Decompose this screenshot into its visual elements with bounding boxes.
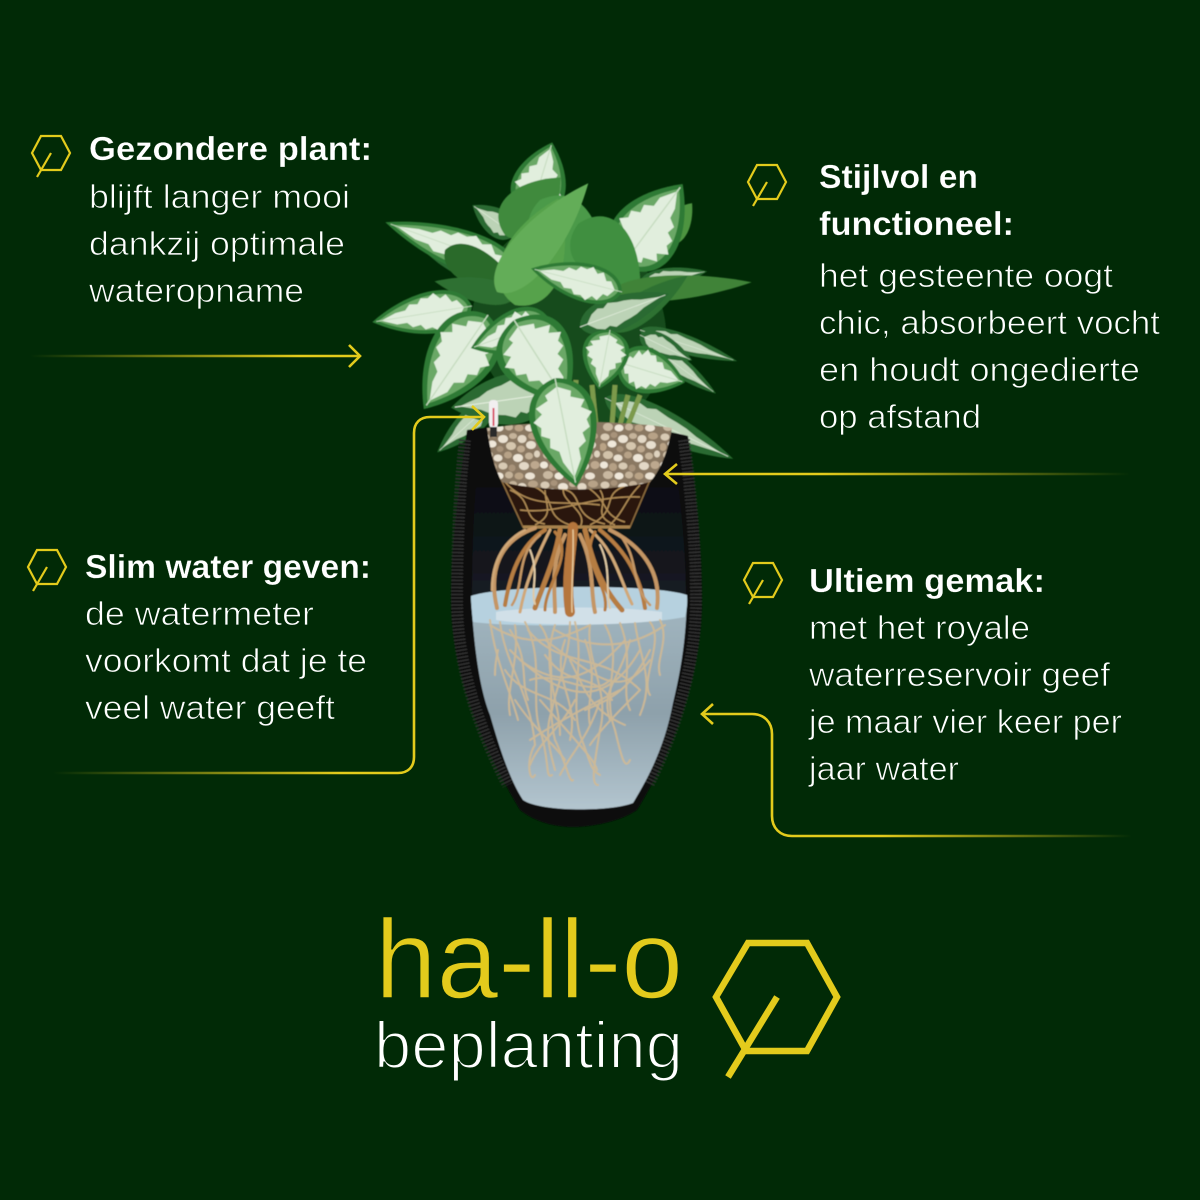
text: slim water geven: Slim water geven: — [85, 548, 371, 585]
text: gezondere plant: blijft langer mooi — [89, 178, 350, 215]
arrow: slim water geven — [53, 406, 484, 773]
text: ultiem gemak: met het royale — [809, 609, 1030, 646]
text: gezondere plant — [88, 130, 372, 309]
logo wordmark — [374, 897, 683, 1082]
arrow: ultiem gemak — [702, 704, 1132, 836]
text: slim water geven: veel water geeft — [85, 689, 335, 726]
text: ultiem gemak: Ultiem gemak: — [809, 562, 1045, 599]
plant illustration with cutaway pot — [369, 134, 753, 827]
submerged roots — [490, 620, 665, 785]
text: ultiem gemak: waterreservoir geef — [808, 656, 1111, 693]
pot — [451, 425, 702, 827]
text: stijlvol en functioneel: het gesteente oogt — [819, 257, 1113, 294]
text: ultiem gemak — [808, 562, 1122, 787]
text: ultiem gemak: je maar vier keer per — [808, 703, 1122, 740]
text: stijlvol en functioneel — [819, 158, 1160, 435]
pot ribbed sides — [457, 440, 508, 785]
icon: hexagon leaf — [744, 563, 782, 604]
text: slim water geven: de watermeter — [85, 595, 314, 632]
panel: slim water geven — [28, 548, 371, 726]
logo wordmark: beplanting — [374, 1008, 683, 1082]
arrow: gezondere plant — [30, 345, 360, 367]
water surface — [471, 587, 687, 625]
panel: stijlvol en functioneel — [748, 158, 1160, 435]
panel: ultiem gemak — [744, 562, 1122, 787]
water meter — [489, 400, 498, 437]
text: gezondere plant: dankzij optimale — [89, 225, 345, 262]
text: slim water geven: voorkomt dat je te — [85, 642, 367, 679]
pebble layer — [487, 422, 672, 490]
pot interior — [472, 440, 686, 600]
icon: hexagon leaf — [748, 165, 786, 206]
plant front foliage — [396, 250, 692, 493]
text: stijlvol en functioneel: Stijlvol en — [819, 158, 978, 195]
logo hexagon leaf — [716, 943, 837, 1077]
plant back foliage — [369, 134, 753, 474]
text: gezondere plant: Gezondere plant: — [89, 130, 372, 167]
icon: hexagon leaf — [28, 550, 66, 591]
water reservoir — [471, 587, 687, 809]
logo wordmark: ha-ll-o — [375, 897, 683, 1022]
text: stijlvol en functioneel: chic, absorbeert vocht — [819, 304, 1160, 341]
panel: gezondere plant — [32, 130, 372, 309]
upper roots — [492, 527, 658, 612]
logo — [374, 897, 837, 1082]
text: stijlvol en functioneel: functioneel: — [819, 205, 1014, 242]
text: stijlvol en functioneel: en houdt ongedierte — [819, 351, 1140, 388]
text: gezondere plant: wateropname — [88, 272, 304, 309]
text: ultiem gemak: jaar water — [808, 750, 959, 787]
arrow: stijlvol en functioneel — [665, 464, 1130, 484]
text: stijlvol en functioneel: op afstand — [819, 398, 981, 435]
text: slim water geven — [85, 548, 371, 726]
icon: hexagon leaf — [32, 136, 70, 177]
soil basket with roots — [500, 477, 650, 527]
